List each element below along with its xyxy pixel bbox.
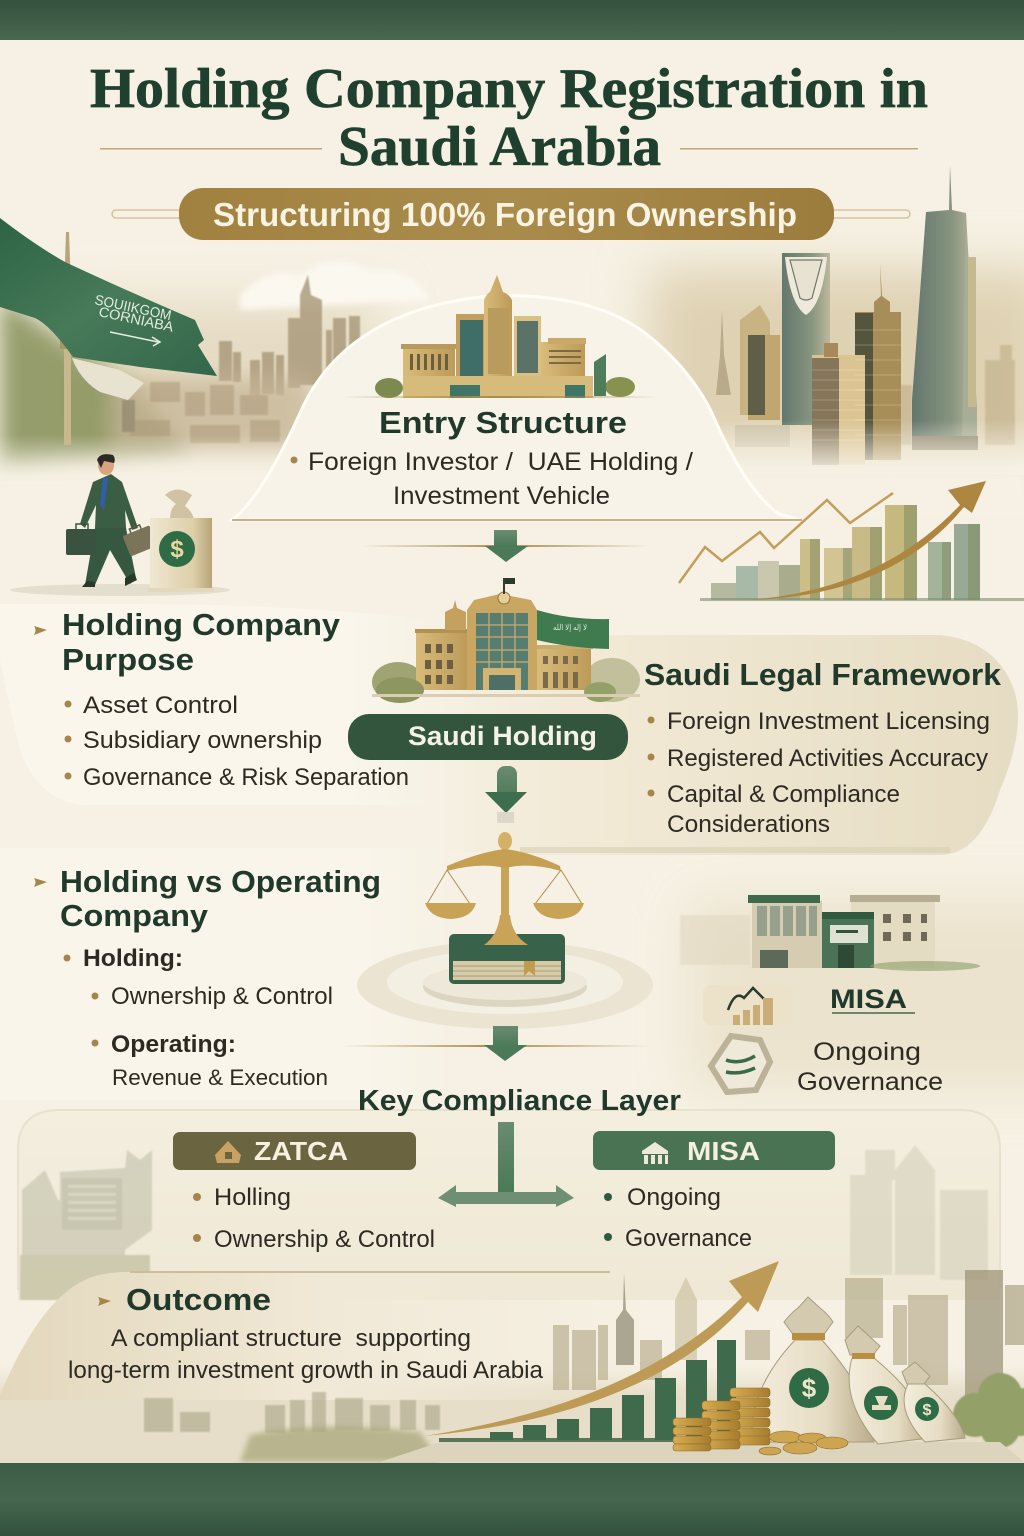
icon: saudi holding building: لا إله إلا الله: [553, 623, 587, 632]
heading: holding company purpose: Holding Company: [62, 607, 341, 642]
illustration: money growth scene: [380, 1261, 1024, 1462]
badge: saudi holding: [348, 714, 628, 760]
list: holding and operating details: Revenue & Execution: [112, 1065, 328, 1090]
icon: heading marker: [34, 626, 47, 635]
icon: small money bag: [902, 1362, 965, 1442]
illustration: outcome skyline: [144, 1270, 1024, 1462]
panel: key compliance layer: [18, 1085, 1000, 1300]
icon: Saudi flag: SOUIIKGOM: [93, 291, 173, 323]
badge: ZATCA: ZATCA: [254, 1136, 348, 1166]
item: ongoing governance with hex icon: Ongoing: [813, 1038, 921, 1066]
panel: holding vs operating: [0, 848, 450, 1100]
icon: saudi holding building: [372, 578, 640, 703]
panel: entry structure: [232, 275, 802, 521]
icon: loose coins: [759, 1431, 848, 1455]
badge: MISA: [593, 1131, 835, 1170]
item: MISA with chart icon: [703, 984, 915, 1025]
item: ongoing governance with hex icon: [711, 1036, 943, 1096]
title: Saudi Arabia: [338, 116, 661, 178]
icon: entry building complex: [340, 275, 660, 398]
item: MISA with chart icon: MISA: [830, 984, 907, 1014]
list: MISA items: Governance: [625, 1225, 752, 1252]
arrow: growth arrow: [425, 1261, 779, 1436]
arrow: comparison to compliance: [340, 1026, 650, 1061]
arrow: entry to holding: [360, 530, 650, 562]
subtitle pill: [112, 188, 910, 240]
list: MISA items: Ongoing: [627, 1184, 721, 1211]
list: holding and operating details: Ownership & Control: [111, 983, 333, 1010]
heading: outcome: Outcome: [126, 1282, 271, 1317]
badge: MISA: MISA: [687, 1136, 760, 1166]
list: legal bullets: [648, 708, 990, 838]
arrow: holding to comparison: [485, 766, 527, 823]
list: holding and operating details: [64, 945, 333, 1090]
list: legal bullets: Considerations: [667, 811, 830, 838]
text: entry structure bullets: Foreign Investor / UAE Holding /: [308, 448, 693, 476]
text: outcome description: long-term investment growth in Saudi Arabia: [68, 1357, 544, 1384]
heading: holding vs operating company: Holding vs Operating: [60, 864, 381, 899]
title: [90, 58, 928, 178]
panel: outcome: [0, 1270, 1024, 1480]
illustration: faded right skyline: [850, 1145, 988, 1280]
illustration: faded left skyline: [20, 1150, 152, 1300]
icon: coin stacks: [673, 1388, 770, 1451]
list: purpose bullets: Subsidiary ownership: [83, 727, 322, 754]
list: holding and operating details: Operating:: [111, 1031, 236, 1058]
icon: large money bag: $: [802, 1373, 817, 1403]
heading: holding vs operating company: [60, 864, 381, 933]
list: holding and operating details: Holding:: [83, 945, 183, 972]
heading: holding company purpose: [62, 607, 341, 677]
icon: money box: $: [170, 536, 184, 563]
list: legal bullets: Capital & Compliance: [667, 781, 900, 808]
icon: Saudi flag: CORNIABA: [97, 303, 176, 335]
icon: marker: [98, 1297, 111, 1306]
left city and hills: [0, 275, 360, 544]
panel: saudi legal framework: [440, 635, 1018, 855]
list: MISA items: [604, 1184, 752, 1252]
list: ZATCA items: Ownership & Control: [214, 1226, 435, 1253]
heading: holding vs operating company: Company: [60, 898, 209, 933]
right skyline: [700, 165, 1024, 514]
icon: money box: [148, 490, 214, 592]
heading: key compliance layer: Key Compliance Layer: [358, 1085, 681, 1117]
hero haze background: [60, 261, 1024, 460]
icon: medium money bag: [845, 1326, 930, 1444]
title: Holding Company Registration in: [90, 58, 928, 120]
top band: [0, 0, 1024, 40]
heading: holding company purpose: Purpose: [62, 642, 194, 677]
icon: scales of justice on book: [357, 832, 653, 1029]
connector: branching arrow: [438, 1122, 574, 1207]
item: ongoing governance with hex icon: Governance: [797, 1068, 943, 1096]
illustration: businessman with briefcases: [10, 454, 230, 596]
bottom band: [0, 1463, 1024, 1536]
text: entry structure bullets: [290, 448, 693, 510]
text: outcome description: A compliant structure supporting: [111, 1325, 471, 1352]
list: purpose bullets: [64, 692, 409, 791]
subtitle pill: Structuring 100% Foreign Ownership: [213, 196, 797, 233]
icon: Saudi flag: [0, 218, 217, 400]
icon: large money bag: [752, 1297, 874, 1442]
icon: small money bag: $: [923, 1402, 932, 1419]
list: legal bullets: Foreign Investment Licensing: [667, 708, 990, 735]
heading: saudi legal framework: Saudi Legal Framework: [644, 657, 1002, 692]
icon: operating company buildings: [680, 895, 980, 971]
text: outcome description: [68, 1325, 544, 1384]
list: purpose bullets: Asset Control: [83, 692, 238, 719]
panel: holding company purpose: [0, 604, 430, 805]
list: legal bullets: Registered Activities Accuracy: [667, 745, 988, 772]
list: ZATCA items: [193, 1184, 435, 1253]
chart: rising bars and arrow: [679, 481, 1024, 601]
badge: saudi holding: Saudi Holding: [408, 721, 597, 751]
icon: flag pole: [60, 232, 72, 445]
icon: heading marker: [34, 878, 47, 887]
badge: ZATCA: [173, 1132, 416, 1170]
list: purpose bullets: Governance & Risk Separation: [83, 764, 409, 791]
list: ZATCA items: Holling: [214, 1184, 291, 1211]
panel: right tinted backdrop: [690, 900, 1024, 1090]
text: entry structure bullets: Investment Vehicle: [393, 482, 610, 510]
chart: green growth bars: [439, 1340, 739, 1442]
heading: entry structure: Entry Structure: [379, 405, 627, 440]
